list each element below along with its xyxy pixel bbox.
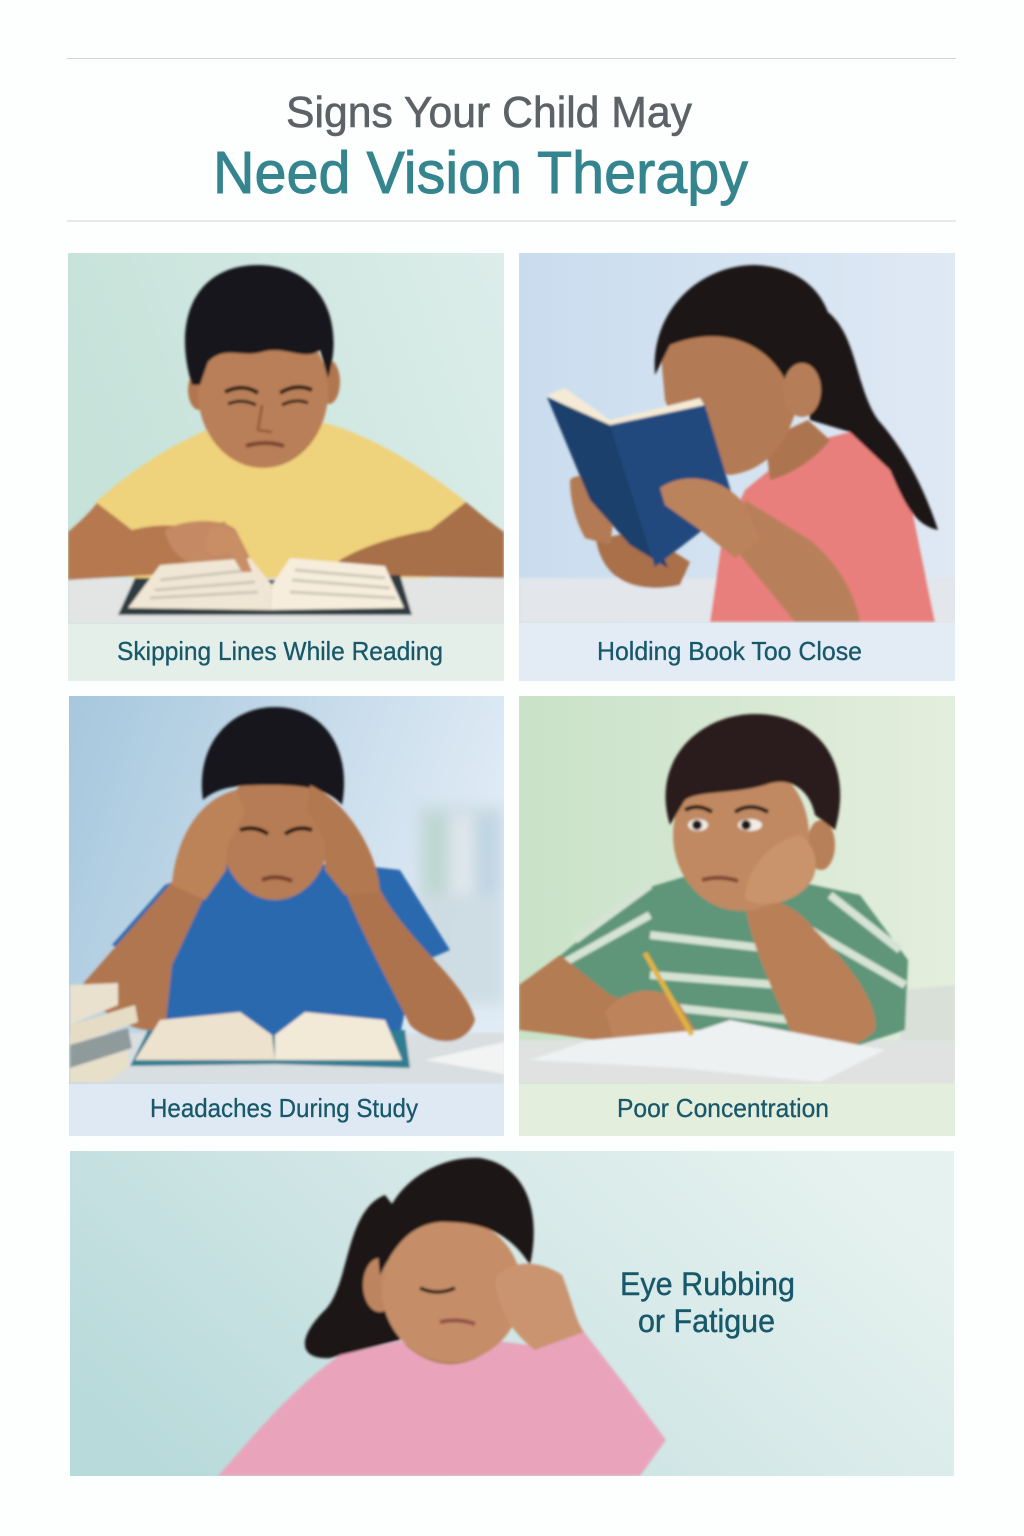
- illustration: distracted boy writing: [519, 714, 955, 1084]
- header: [67, 58, 956, 221]
- caption: Headaches During Study: [150, 1093, 418, 1123]
- caption band: [69, 1084, 504, 1136]
- blurred bookshelf: [418, 805, 504, 1005]
- illustration: girl holding book close to face: [519, 265, 955, 623]
- panel: eye rubbing or fatigue: [70, 1151, 954, 1476]
- panel: poor concentration: [519, 696, 955, 1136]
- title line 1: Signs Your Child May: [286, 88, 692, 137]
- illustration: girl rubbing eye: [218, 1158, 666, 1476]
- caption: Poor Concentration: [617, 1093, 829, 1123]
- panel text: [620, 1266, 795, 1339]
- illustration: boy holding head over book: [69, 707, 504, 1084]
- panel: headaches during study: [69, 696, 504, 1136]
- illustration: boy reading with finger: [68, 265, 504, 624]
- title line 2: Need Vision Therapy: [213, 140, 748, 206]
- caption: Skipping Lines While Reading: [117, 636, 443, 666]
- caption band: [68, 624, 504, 681]
- caption band: [519, 623, 955, 681]
- panel text: Eye Rubbing: [620, 1266, 795, 1302]
- caption: Holding Book Too Close: [597, 636, 862, 666]
- caption band: [519, 1084, 955, 1136]
- panel text: or Fatigue: [638, 1303, 775, 1339]
- panel: holding book too close: [519, 253, 955, 681]
- panel: skipping lines while reading: [68, 253, 504, 681]
